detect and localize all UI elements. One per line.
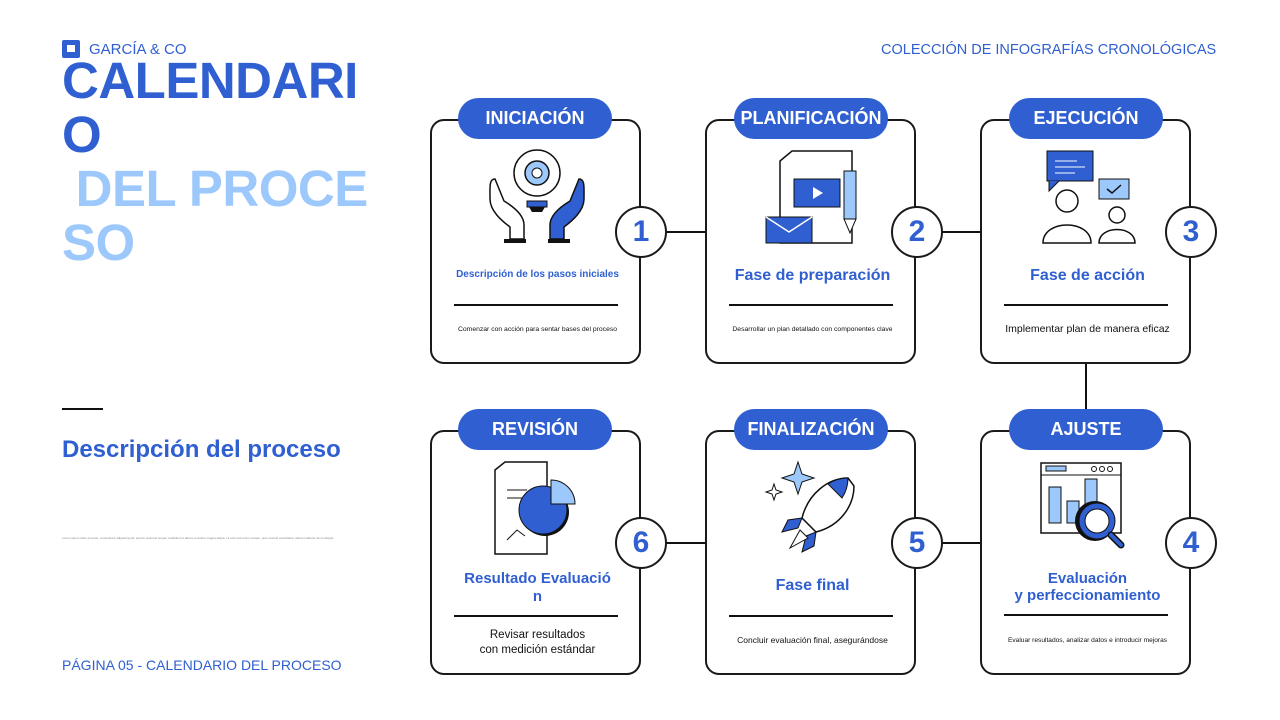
- pill: finalizacion: FINALIZACIÓN: [748, 419, 874, 439]
- panel: 6 revision: [430, 430, 641, 675]
- brand name: GARCÍA & CO: [89, 41, 187, 58]
- step description: Concluir evaluación final, asegurándose: [737, 635, 888, 645]
- number 2: 2: [909, 215, 925, 248]
- footer: PÁGINA 05 - CALENDARIO DEL PROCESO: [62, 657, 342, 673]
- pill: iniciacion: INICIACIÓN: [486, 108, 584, 128]
- icon: chart magnifier: [1040, 462, 1124, 548]
- title: O: [62, 106, 101, 163]
- number 1: [615, 206, 667, 258]
- title: CALENDARI: [62, 52, 358, 109]
- icon: logo mark: [62, 40, 80, 58]
- pill: ejecucion: EJECUCIÓN: [1033, 108, 1139, 128]
- step title: Fase de acción: [1030, 267, 1145, 284]
- tiny body text: Lorem ipsum dolor sit amet, consectetur adipiscing elit, sed do eiusmod tempor incididunt ut labore et dolore magna aliqua. Ut enim ad minim veniam, quis nostrud exercitation ullamco laboris nisi ut aliquip.: [62, 536, 334, 540]
- pill: ajuste: AJUSTE: [1050, 419, 1122, 439]
- number 4: 4: [1183, 526, 1199, 559]
- panel: 4 ajuste: [980, 430, 1191, 675]
- step description: Evaluar resultados, analizar datos e introducir mejoras: [1008, 637, 1167, 644]
- number 3: 3: [1183, 215, 1199, 248]
- title: [62, 52, 368, 271]
- panel: 2 planificacion: [705, 119, 916, 364]
- number 2: [891, 206, 943, 258]
- title: SO: [62, 214, 135, 271]
- step title: Fase de preparación: [735, 267, 890, 284]
- step title: Descripción de los pasos iniciales: [456, 269, 619, 280]
- number 6: 6: [633, 526, 649, 559]
- pill: finalizacion: [734, 409, 888, 450]
- step title: n: [533, 588, 542, 605]
- number 5: 5: [909, 526, 925, 559]
- step title: Resultado Evaluació: [464, 570, 611, 587]
- pill: ajuste: [1009, 409, 1163, 450]
- step title: Evaluación: [1048, 570, 1127, 587]
- panel: 1 iniciacion: [430, 119, 641, 364]
- pill: planificacion: PLANIFICACIÓN: [740, 108, 882, 128]
- title: DEL PROCE: [76, 160, 368, 217]
- icon: people chat: [1042, 150, 1136, 244]
- step description: con medición estándar: [480, 644, 595, 656]
- step title: [1014, 570, 1160, 604]
- logo: [62, 40, 187, 58]
- pill: revision: REVISIÓN: [492, 419, 578, 439]
- icon: hands bulb: [489, 149, 585, 243]
- step description: Revisar resultados: [490, 629, 585, 641]
- step title: [464, 570, 611, 605]
- connectors: [666, 231, 706, 232]
- icon: document video: [766, 150, 857, 244]
- number 3: [1165, 206, 1217, 258]
- header right: COLECCIÓN DE INFOGRAFÍAS CRONOLÓGICAS: [881, 42, 1216, 58]
- step description: Desarrollar un plan detallado con componentes clave: [732, 326, 893, 333]
- icon: report pie: [494, 461, 576, 555]
- number 6: [615, 517, 667, 569]
- divider short: [62, 408, 103, 410]
- icon: rocket: [764, 460, 855, 553]
- number 5: [891, 517, 943, 569]
- step description: Comenzar con acción para sentar bases del proceso: [458, 326, 617, 333]
- pill: iniciacion: [458, 98, 612, 139]
- step description: Implementar plan de manera eficaz: [1005, 323, 1170, 335]
- subtitle: Descripción del proceso: [62, 436, 341, 463]
- step title: Fase final: [776, 577, 849, 594]
- pill: planificacion: [734, 98, 888, 139]
- panel: 5 finalizacion: [705, 430, 916, 675]
- step description: [480, 629, 596, 656]
- number 4: [1165, 517, 1217, 569]
- pill: revision: [458, 409, 612, 450]
- number 1: 1: [633, 215, 649, 248]
- pill: ejecucion: [1009, 98, 1163, 139]
- panel: 3 ejecucion: [980, 119, 1191, 364]
- step title: y perfeccionamiento: [1015, 587, 1160, 604]
